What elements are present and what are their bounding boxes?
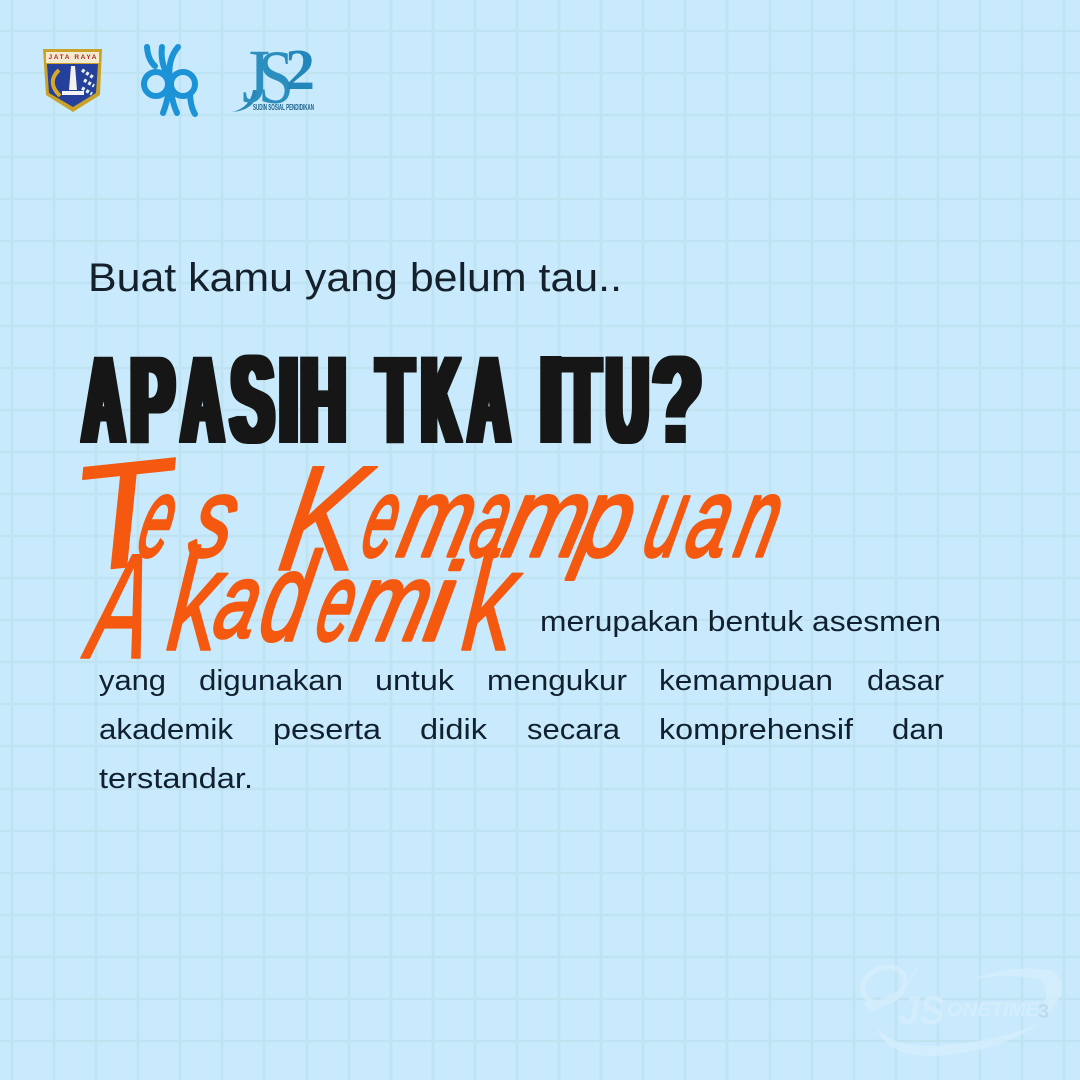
logo: JS2: SUDIN SOSIAL PENDIDIKAN: [253, 103, 314, 112]
script heading: Akademik: [75, 518, 530, 691]
logo: JS2: [232, 35, 315, 120]
title: APASIH TKA ITU?: K: [422, 331, 459, 468]
script heading: Tes Kemampuan: p: [565, 454, 649, 580]
script heading: Akademik: d: [250, 527, 328, 667]
body paragraph: secara: [527, 714, 621, 746]
title: APASIH TKA ITU?: A: [182, 332, 223, 469]
title: APASIH TKA ITU?: T: [378, 332, 413, 469]
title: APASIH TKA ITU?: S: [231, 330, 274, 468]
script heading: Tes Kemampuan: m: [494, 455, 604, 580]
logo: Jakarta coat of arms: JATA RAYA: [48, 54, 97, 61]
script heading: Tes Kemampuan: e: [128, 456, 190, 581]
intro line: Buat kamu yang belum tau..: [88, 256, 622, 300]
script heading: Akademik: k: [457, 518, 530, 681]
body paragraph: terstandar.: [99, 763, 253, 795]
script heading: Tes Kemampuan: n: [726, 456, 796, 581]
watermark: JS Onetime 3: ONETIME: [947, 1000, 1040, 1021]
watermark: JS Onetime 3: [857, 960, 1062, 1056]
body paragraph: yang: [99, 665, 166, 697]
body paragraph: peserta: [273, 714, 382, 746]
script heading: Tes Kemampuan: T: [64, 427, 190, 604]
logo: JS2: J: [242, 35, 270, 119]
watermark: JS Onetime 3: JS: [899, 989, 944, 1033]
title: APASIH TKA ITU?: H: [300, 331, 346, 468]
title: APASIH TKA ITU?: A: [469, 332, 509, 469]
script heading: Tes Kemampuan: a: [460, 454, 526, 580]
body paragraph: mengukur: [487, 665, 627, 697]
body paragraph: digunakan: [199, 665, 343, 697]
script heading: Tes Kemampuan: e: [352, 456, 414, 581]
script heading: Tes Kemampuan: u: [634, 454, 701, 580]
body paragraph: akademik: [99, 714, 234, 746]
title: APASIH TKA ITU?: U: [606, 332, 648, 469]
body paragraph: untuk: [375, 665, 455, 697]
title: APASIH TKA ITU?: T: [564, 332, 600, 469]
title: APASIH TKA ITU?: P: [130, 331, 174, 468]
script heading: Akademik: A: [75, 523, 164, 691]
logo: Jakarta coat of arms: [43, 49, 102, 112]
body paragraph: [99, 606, 944, 795]
title: APASIH TKA ITU?: ?: [652, 332, 702, 469]
logo: DPR emblem: [144, 47, 195, 114]
title: APASIH TKA ITU?: I: [539, 332, 563, 469]
title: APASIH TKA ITU?: [83, 330, 702, 469]
body paragraph: didik: [420, 714, 488, 746]
script heading: Akademik: e: [306, 542, 370, 664]
body paragraph: dasar: [867, 665, 944, 697]
watermark: JS Onetime 3: 3: [1038, 1001, 1049, 1023]
script heading: Tes Kemampuan: K: [269, 435, 384, 603]
title: APASIH TKA ITU?: I: [279, 332, 298, 469]
body paragraph: merupakan bentuk asesmen: [540, 606, 941, 638]
script heading: Akademik: i: [418, 542, 467, 664]
body paragraph: komprehensif: [659, 714, 854, 746]
logo: JS2: S: [258, 36, 294, 120]
script heading: Tes Kemampuan: a: [676, 456, 747, 580]
script heading: Akademik: a: [204, 542, 275, 660]
script heading: Akademik: k: [162, 518, 235, 681]
logo: JS2: 2: [285, 37, 315, 102]
script heading: Akademik: m: [342, 540, 446, 664]
body paragraph: kemampuan: [659, 665, 833, 697]
body paragraph: dan: [892, 714, 944, 746]
script heading: Tes Kemampuan: m: [389, 456, 490, 580]
script heading: Tes Kemampuan: s: [180, 456, 251, 581]
title: APASIH TKA ITU?: A: [83, 332, 124, 469]
script heading: Tes Kemampuan: [64, 427, 796, 604]
